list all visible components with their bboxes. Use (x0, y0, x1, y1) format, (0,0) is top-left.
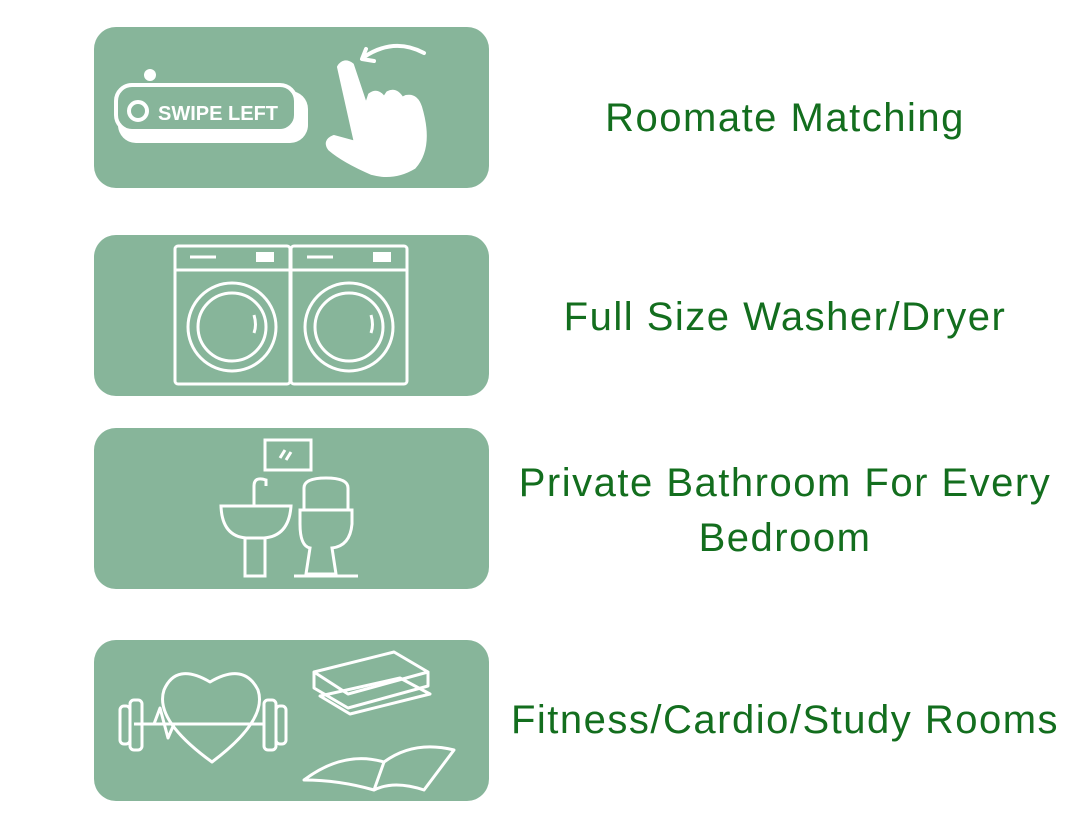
icon: sink toilet mirror (221, 440, 358, 576)
icon: swipe left button (116, 69, 308, 143)
icon: swipe left button: SWIPE LEFT (158, 103, 278, 125)
icon: washers (175, 246, 407, 384)
icon: heart dumbbell (120, 674, 286, 762)
panel: washer dryer (94, 235, 489, 396)
text: washer dryer: Full Size Washer/Dryer (564, 295, 1006, 339)
text: bathroom: Bedroom (699, 516, 871, 560)
text: bathroom: Private Bathroom For Every (519, 461, 1051, 505)
text: bathroom (519, 461, 1051, 560)
text: roommate matching: Roomate Matching (605, 96, 965, 140)
panel: bathroom (94, 428, 489, 589)
panel: roommate matching (94, 27, 489, 188)
text: fitness study: Fitness/Cardio/Study Rooms (511, 698, 1059, 742)
icon: books (304, 652, 454, 790)
panel: fitness study (94, 640, 489, 801)
icon: hand with arrow (328, 46, 425, 175)
